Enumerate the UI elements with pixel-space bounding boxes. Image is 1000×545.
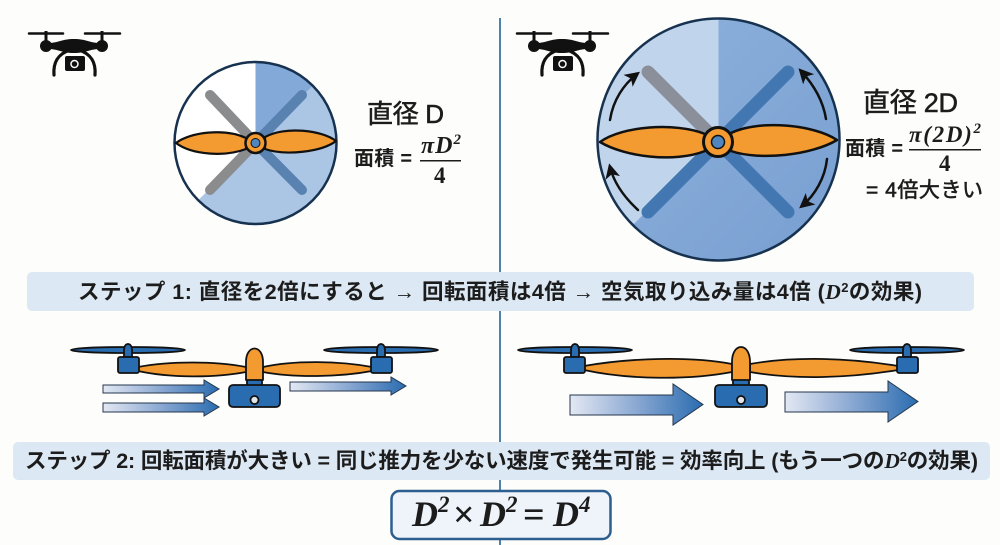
formula: area for 2D: 4: [939, 151, 951, 176]
airflow arrows, small rotors: [103, 377, 406, 416]
formula: area for D: 面積 =: [354, 147, 412, 170]
banner: step 2: ステップ 2: 回転面積が大きい = 同じ推力を少ない速度で発生可能 = 効率向上 (もう一つのD: [25, 449, 900, 473]
banner: step 1: 2: [841, 280, 848, 295]
formula: area for 2D: = 4倍大きい: [866, 179, 983, 202]
banner: step 2: の効果): [907, 449, 978, 473]
banner: step 2: 2: [900, 449, 907, 464]
result formula box: 2: [437, 492, 450, 517]
result formula box: [392, 491, 610, 539]
icon: small drone, left: [29, 31, 120, 75]
result formula box: 4: [578, 492, 590, 517]
result formula box: D: [412, 494, 438, 534]
result formula box: ×: [453, 494, 475, 536]
airflow arrows, large rotors: [570, 381, 918, 425]
formula: area for 2D: 2: [972, 121, 982, 137]
result formula box: 2: [505, 492, 518, 517]
result formula box: D: [553, 494, 579, 534]
small rotor disc with propeller: [174, 62, 337, 224]
formula: area for D: [354, 132, 462, 188]
banner: step 1: [27, 272, 974, 311]
result formula box: =: [523, 494, 545, 536]
result formula box: D: [480, 494, 506, 534]
banner: step 1: の効果): [849, 280, 922, 304]
formula: area for D: 4: [434, 163, 446, 188]
heading: diameter D: 直径 D: [367, 99, 444, 129]
side drone with small rotors: [71, 344, 438, 407]
formula: area for 2D: π(2D): [909, 122, 972, 147]
banner: step 2: [13, 442, 990, 480]
large rotor disc with propeller and rotation arrows: [598, 18, 840, 260]
formula: area for D: πD: [421, 133, 452, 159]
formula: area for 2D: 面積 =: [845, 137, 903, 160]
side drone with large rotors: [518, 344, 964, 407]
formula: area for 2D: [845, 121, 983, 202]
rotation arrows: [610, 71, 827, 210]
formula: area for D: 2: [452, 132, 462, 148]
icon: small drone, right: [517, 31, 608, 75]
banner: step 1: ステップ 1: 直径を2倍にすると → 回転面積は4倍 → 空気取り込み量は4倍 (D: [78, 280, 841, 304]
heading: diameter 2D: 直径 2D: [863, 88, 958, 118]
